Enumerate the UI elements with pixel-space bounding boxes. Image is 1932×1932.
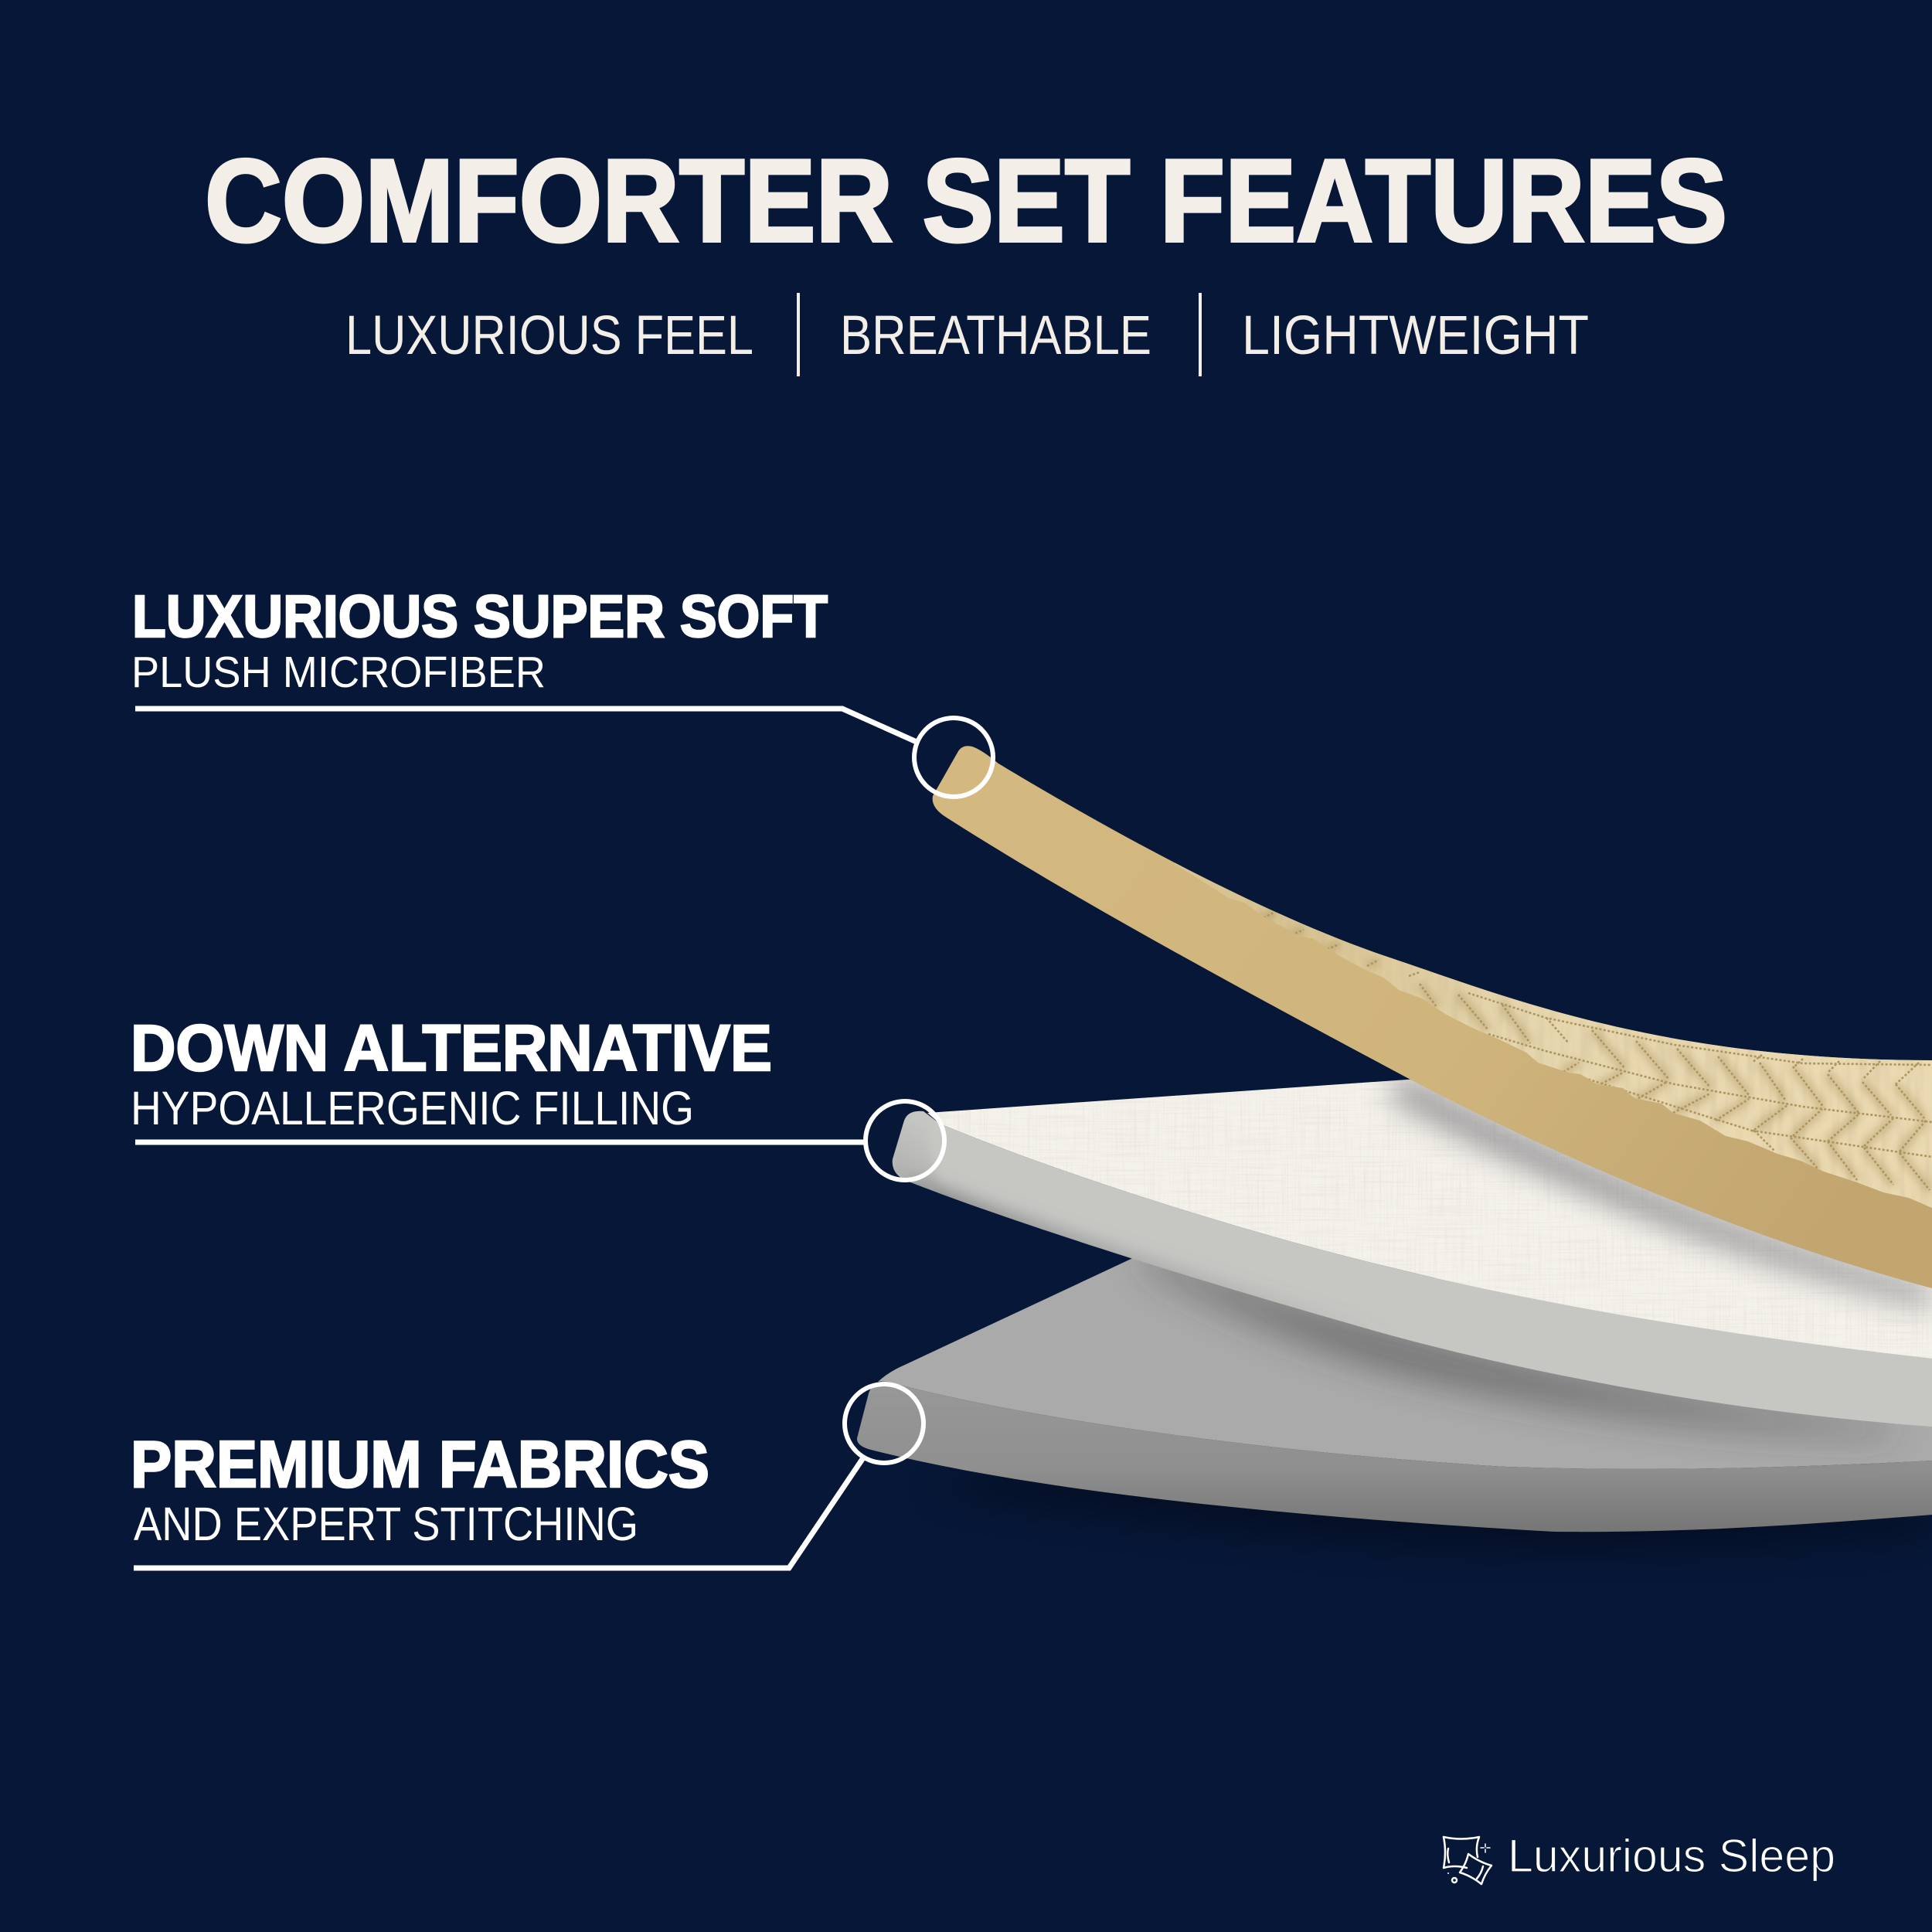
callout subheading: PLUSH MICROFIBER — [131, 648, 546, 697]
quilt stitching — [1260, 912, 1932, 1190]
layer: down alternative white filling — [889, 1074, 1932, 1427]
quilted gold top surface — [1175, 862, 1932, 1208]
leader line — [134, 1457, 864, 1568]
callout subheading: AND EXPERT STITCHING — [134, 1498, 638, 1550]
brand name: Luxurious Sleep — [1508, 1830, 1835, 1882]
band lower-edge shading near tip — [892, 1111, 1300, 1309]
icon: pillows — [1444, 1837, 1492, 1884]
subtitle row: three benefits — [345, 293, 1589, 376]
layer: premium fabrics gray shell — [857, 1252, 1932, 1549]
benefit: breathable: BREATHABLE — [840, 305, 1151, 366]
callout heading: LUXURIOUS SUPER SOFT — [132, 583, 828, 650]
marker circle — [845, 1384, 923, 1463]
callout: premium fabrics — [131, 1384, 923, 1568]
callout subheading: HYPOALLERGENIC FILLING — [131, 1082, 694, 1134]
callout: down alternative — [131, 1012, 944, 1180]
callout heading: PREMIUM FABRICS — [131, 1428, 709, 1502]
linen weave texture — [920, 1074, 1932, 1368]
gold edge band — [933, 746, 1932, 1288]
brand logo — [1444, 1830, 1835, 1884]
linen top surface — [927, 1078, 1932, 1359]
title: COMFORTER SET FEATURES — [205, 135, 1727, 267]
marker circle — [866, 1101, 944, 1180]
gray edge band — [857, 1381, 1932, 1532]
shadow cast by white layer on gray — [1144, 1252, 1893, 1434]
white edge band — [893, 1111, 1932, 1427]
shadow cast by gold layer on linen — [1391, 1075, 1932, 1306]
layer: luxurious gold microfiber — [933, 746, 1932, 1288]
quilt puffy shading — [1260, 912, 1930, 1190]
marker circle — [914, 718, 993, 797]
shadow beneath gray layer — [927, 1468, 1932, 1549]
benefit: luxurious feel: LUXURIOUS FEEL — [345, 305, 753, 366]
gray top fabric — [878, 1257, 1932, 1469]
leader line — [135, 1139, 866, 1145]
leader line — [135, 709, 917, 742]
benefit: lightweight: LIGHTWEIGHT — [1242, 305, 1589, 366]
callout: luxurious super soft — [131, 583, 993, 797]
callout heading: DOWN ALTERNATIVE — [131, 1012, 772, 1084]
